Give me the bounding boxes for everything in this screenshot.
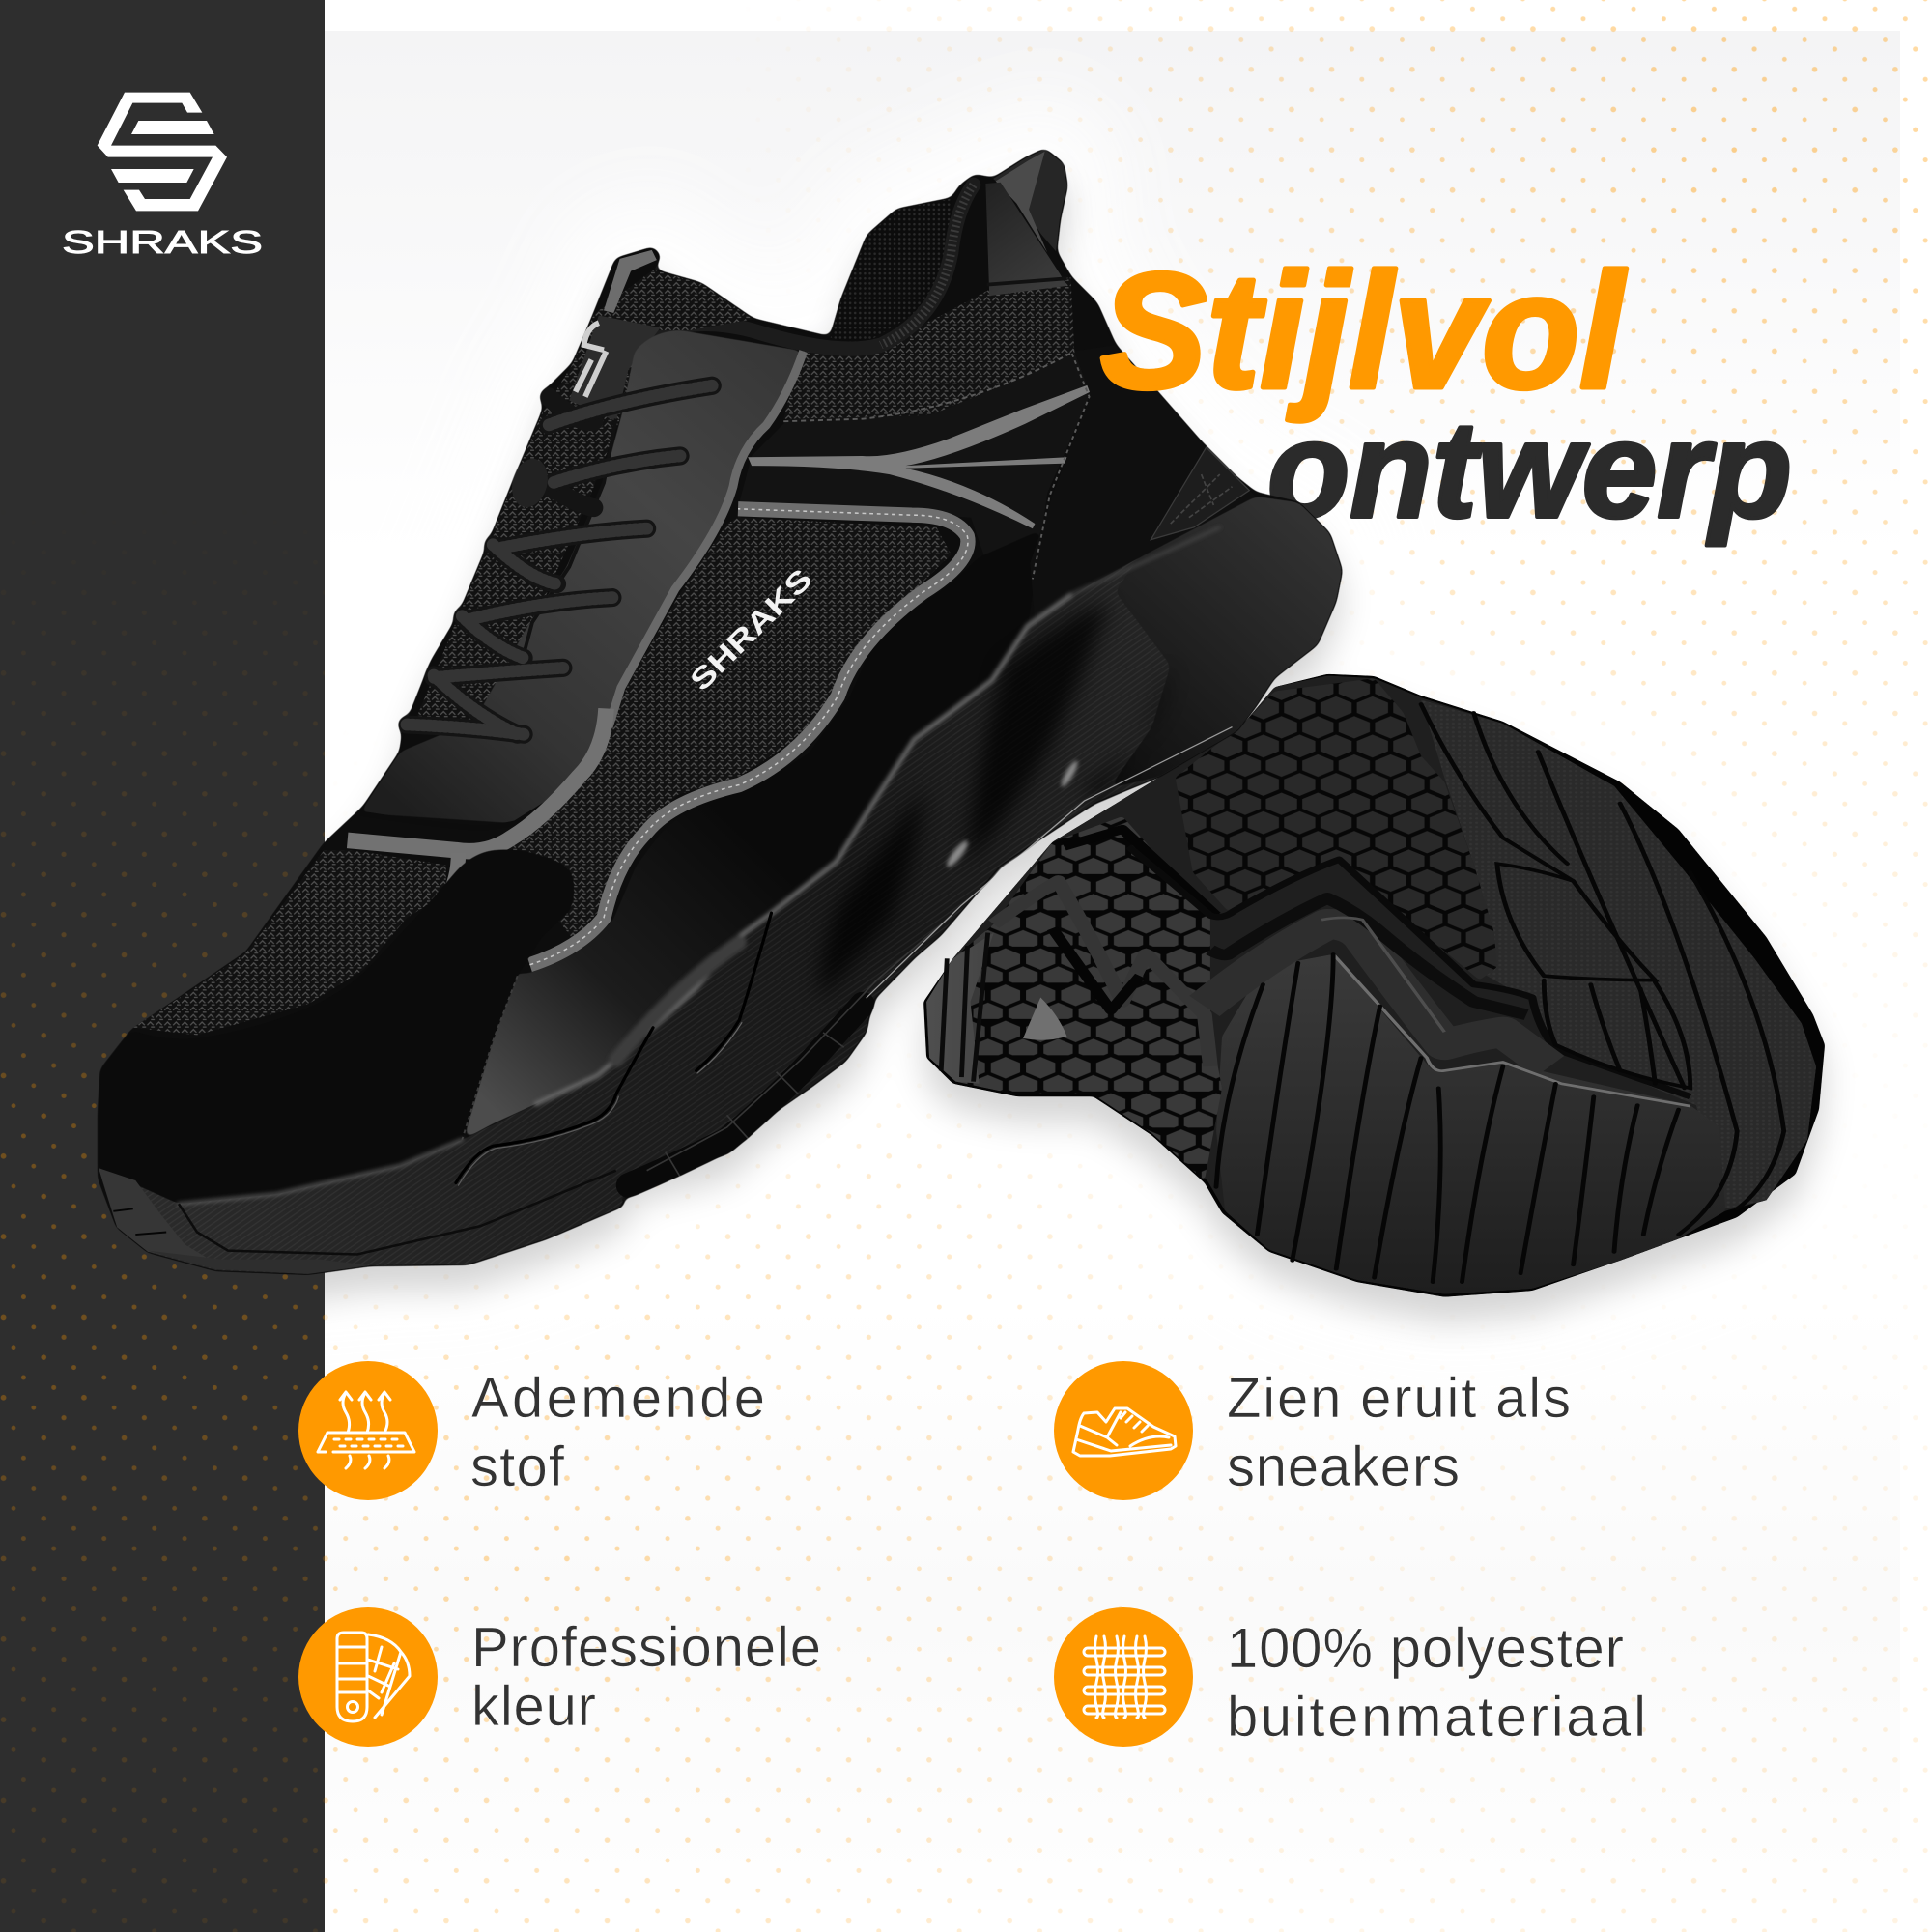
dark sidebar xyxy=(0,0,325,1932)
heel suede xyxy=(1030,345,1256,622)
white halo around shoes xyxy=(99,149,1825,1322)
midsole highlights xyxy=(179,527,1220,1204)
nubuck side band xyxy=(739,352,1091,579)
icon: sneaker xyxy=(1073,1408,1176,1456)
stitched band lines xyxy=(746,352,1074,518)
feature: Zien eruit als sneakers: sneakers xyxy=(1227,1435,1460,1498)
side mesh xyxy=(505,518,952,939)
laces xyxy=(407,385,712,734)
feature: 100% polyester buitenmateriaal: buitenmateriaal xyxy=(1227,1686,1646,1748)
heel pull tab xyxy=(993,149,1067,251)
heel counter xyxy=(985,183,1067,296)
midsole dark wave shadows xyxy=(819,604,1171,998)
feature: 100% polyester buitenmateriaal xyxy=(1054,1607,1646,1748)
zigzag arch ridge xyxy=(994,881,1210,1066)
feature: Ademende stof xyxy=(298,1361,765,1500)
main reflective strip xyxy=(529,509,968,965)
front shoe xyxy=(99,149,1342,1274)
toe bumper xyxy=(99,1168,222,1266)
lace panel grey trim xyxy=(609,352,804,727)
feature: Ademende stof: Ademende xyxy=(471,1367,765,1430)
outsole hex band xyxy=(629,1005,863,1185)
collar rim xyxy=(640,185,974,349)
lace panel xyxy=(359,330,804,823)
midsole grooves xyxy=(456,913,771,1185)
feature: Zien eruit als sneakers: Zien eruit als xyxy=(1227,1367,1571,1430)
heel midsole xyxy=(1109,497,1342,788)
heading: ontwerp: ontwerp xyxy=(1267,393,1792,547)
arch region xyxy=(926,816,1222,1180)
back shoe: outsole xyxy=(923,674,1825,1297)
feature: Professionele kleur xyxy=(298,1607,821,1747)
feature: Professionele kleur: Professionele xyxy=(471,1616,821,1679)
icon: breathable fabric xyxy=(318,1392,414,1468)
logo: Shraks xyxy=(62,93,263,260)
lower leather side panel xyxy=(464,529,1041,1140)
midsole xyxy=(99,497,1342,1274)
toe mesh xyxy=(133,850,446,1035)
chevron channel xyxy=(1128,846,1690,1096)
brand text on shoe: SHRAKS xyxy=(684,562,818,697)
feature: Zien eruit als sneakers xyxy=(1054,1361,1571,1500)
grooves xyxy=(1216,704,1784,1282)
toe section lugs xyxy=(1216,954,1725,1294)
hex region xyxy=(1176,678,1497,980)
toe suede xyxy=(99,850,574,1204)
light inner panel xyxy=(325,31,1900,1900)
tongue xyxy=(412,270,753,727)
collar upper mesh xyxy=(783,277,1074,421)
heel hex piece xyxy=(1151,447,1249,540)
icon: woven fabric xyxy=(1084,1636,1165,1718)
feature: Professionele kleur: kleur xyxy=(471,1675,596,1738)
feature: Ademende stof: stof xyxy=(470,1435,565,1498)
heading: Stijlvol: Stijlvol xyxy=(1100,240,1628,423)
icon: colour swatch fan xyxy=(337,1633,410,1721)
forefoot lugs xyxy=(1421,699,1816,1208)
reflective lines xyxy=(748,384,1095,528)
light spots xyxy=(944,759,1080,869)
logo: Shraks: SHRAKS xyxy=(62,224,263,260)
feature: 100% polyester buitenmateriaal: 100% polyester xyxy=(1227,1617,1624,1680)
collar inner xyxy=(831,198,952,345)
photo: shoes xyxy=(99,149,1825,1297)
